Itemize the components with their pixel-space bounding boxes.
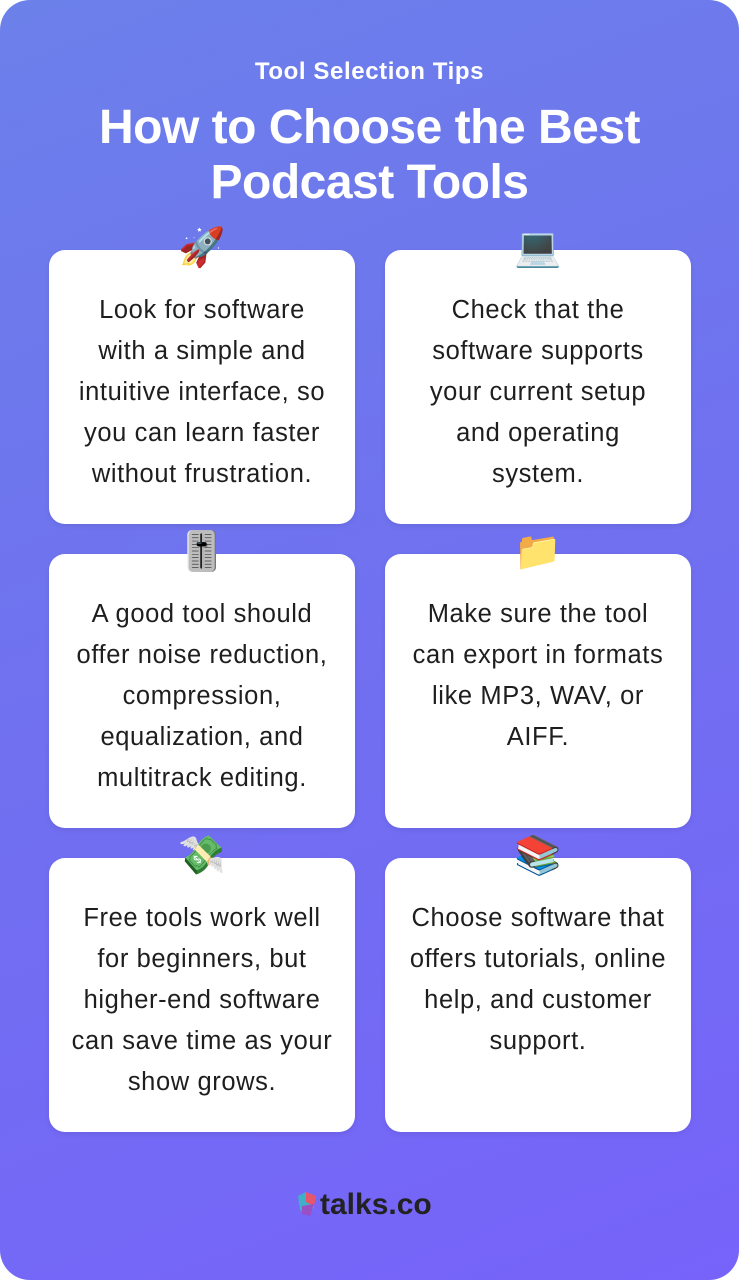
text: software supports — [432, 337, 644, 365]
text: compression, — [123, 682, 281, 710]
card: pricing — [49, 858, 355, 1132]
text: like MP3, WAV, or — [432, 682, 644, 710]
text: your current setup — [430, 378, 646, 406]
card: compatibility — [385, 250, 691, 524]
text: support. — [490, 1027, 586, 1055]
text: can export in formats — [413, 641, 663, 669]
icon: slider: 🎚️ — [178, 530, 226, 574]
text — [77, 600, 327, 792]
card: audio features — [49, 554, 355, 828]
text: system. — [492, 460, 584, 488]
text: and operating — [456, 419, 620, 447]
text: intuitive interface, so — [79, 378, 325, 406]
text: equalization, and — [100, 723, 304, 751]
title: How to Choose the Best — [99, 101, 640, 154]
icon: rocket: 🚀 — [178, 226, 226, 270]
text: offers tutorials, online — [410, 945, 666, 973]
text: multitrack editing. — [97, 764, 307, 792]
text: without frustration. — [92, 460, 312, 488]
icon: folder: 📁 — [514, 530, 562, 574]
text: AIFF. — [507, 723, 569, 751]
text: you can learn faster — [84, 419, 320, 447]
text: A good tool should — [92, 600, 312, 628]
subtitle: Tool Selection Tips — [255, 58, 484, 85]
card: export formats — [385, 554, 691, 828]
card: simple interface — [49, 250, 355, 524]
text: Choose software that — [412, 904, 664, 932]
icon: laptop: 💻 — [514, 226, 562, 270]
title — [99, 101, 640, 209]
text: higher-end software — [84, 986, 320, 1014]
logo: talks.co: talks.co — [320, 1188, 432, 1221]
text: Look for software — [99, 296, 305, 324]
text: help, and customer — [424, 986, 652, 1014]
text — [430, 296, 646, 488]
card: support — [385, 858, 691, 1132]
text: Make sure the tool — [428, 600, 648, 628]
text: with a simple and — [98, 337, 306, 365]
icon: books: 📚 — [514, 834, 562, 878]
text — [410, 904, 666, 1055]
text: show grows. — [128, 1068, 276, 1096]
title: Podcast Tools — [210, 156, 528, 209]
text: Free tools work well — [83, 904, 321, 932]
icon: money: 💸 — [178, 834, 226, 878]
text: Check that the — [452, 296, 624, 324]
text — [79, 296, 325, 488]
text — [413, 600, 663, 751]
text — [72, 904, 332, 1096]
text: offer noise reduction, — [77, 641, 327, 669]
text: can save time as your — [72, 1027, 332, 1055]
text: for beginners, but — [97, 945, 307, 973]
